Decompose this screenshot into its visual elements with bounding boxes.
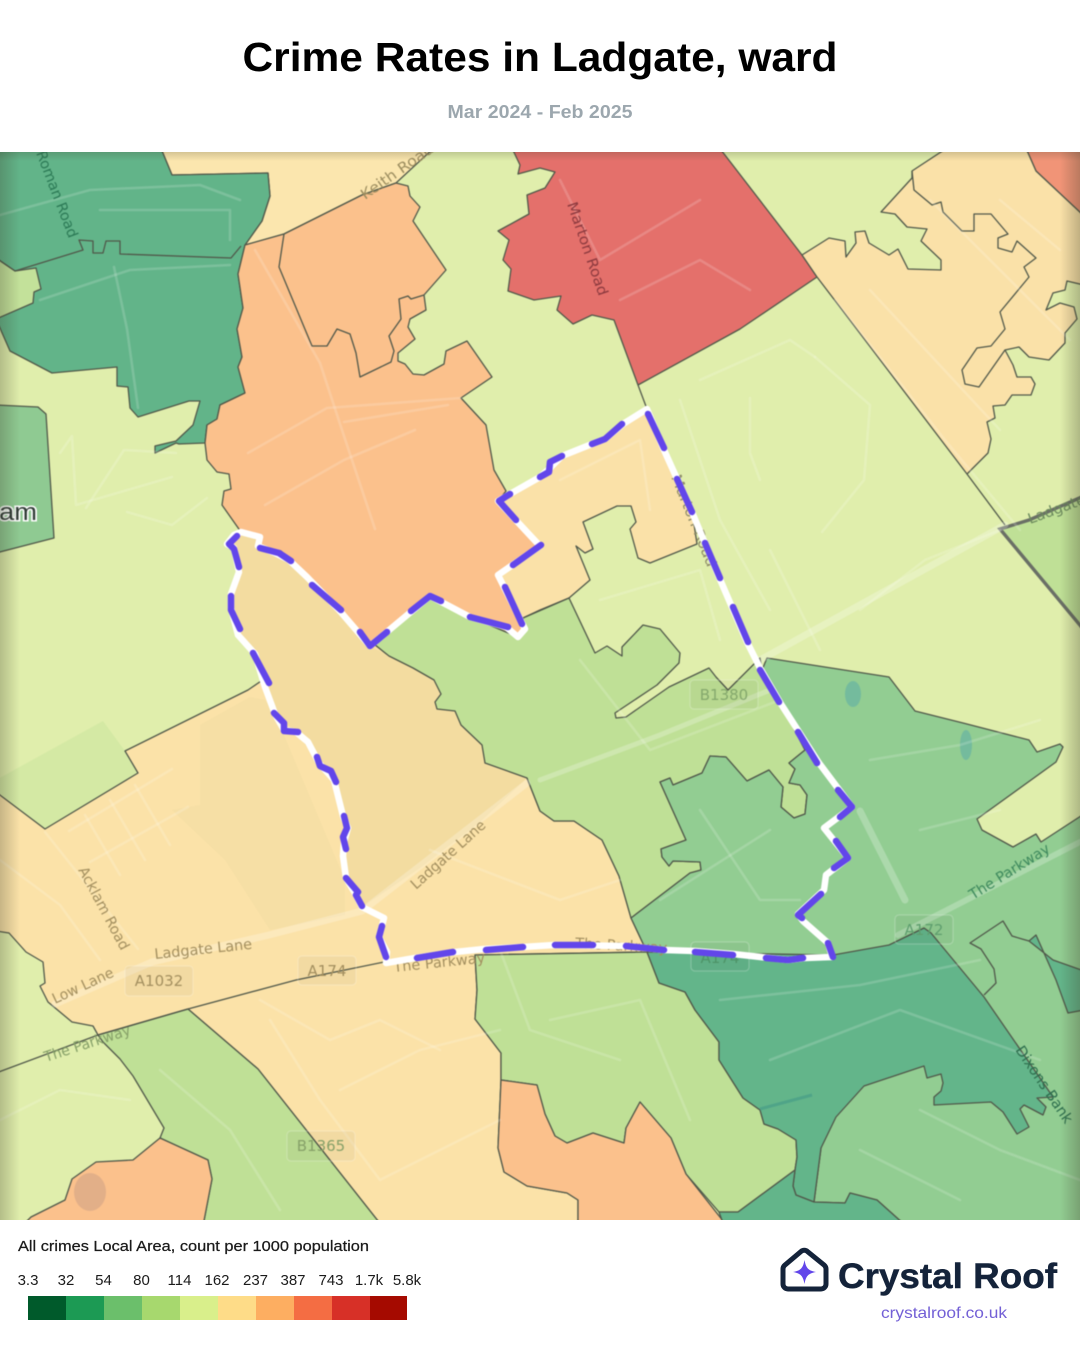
- ward boundary: purple dashes: [229, 414, 852, 960]
- region: south-west green: [98, 1009, 382, 1226]
- region: west park: [0, 405, 54, 553]
- boundary: east inner: [970, 921, 1029, 995]
- road label: Keith Road: Keith Road: [358, 141, 437, 203]
- region: south central green: [475, 952, 797, 1212]
- logo wordmark: Crystal Roof: [838, 1257, 1057, 1296]
- region: far east green: [1003, 500, 1080, 622]
- region: north-west light patch: [0, 258, 41, 319]
- region: east mid green: [631, 658, 1080, 1226]
- region: central green band: [374, 596, 807, 918]
- legend colour scale: [28, 1296, 407, 1320]
- place label: Acklam: am: [0, 499, 37, 526]
- region: south-east dark green: [647, 928, 1053, 1202]
- legend tick values: 237: [243, 1272, 268, 1289]
- road shield: A172: A172: [905, 921, 943, 939]
- boundary: east thick grey: [1000, 496, 1080, 630]
- road label: The Parkway east: The Parkway: [966, 841, 1053, 904]
- road shield: A1032: A1032: [135, 972, 183, 990]
- legend: [18, 1238, 422, 1320]
- region: south dark green strip: [718, 1171, 900, 1220]
- legend tick values: 114: [168, 1272, 191, 1289]
- legend tick values: 387: [280, 1272, 306, 1289]
- road label: Dixons Bank: Dixons Bank: [1012, 1043, 1076, 1127]
- road shield: A172: [895, 915, 953, 944]
- road shield: A1032: [125, 966, 193, 996]
- legend tick values: 1.7k: [355, 1272, 384, 1289]
- legend tick values: 32: [58, 1272, 74, 1289]
- road shield: B1380: [690, 680, 758, 709]
- road label: Marton Road: Marton Road: [563, 200, 610, 298]
- map edge shading: [0, 152, 1080, 1220]
- title: Crime Rates in Ladgate, ward: [242, 34, 838, 80]
- road label: Marton Road along the ward edge: Marton Road: [667, 473, 719, 569]
- region: south-west orange: [22, 1138, 212, 1226]
- road shield: B1365: [287, 1131, 355, 1161]
- legend tick values: 80: [133, 1272, 150, 1289]
- logo: Crystal Roof: [783, 1250, 1057, 1322]
- road label: Acklam Road: Acklam Road: [74, 864, 132, 953]
- region: south orange: [498, 1080, 727, 1226]
- roads: [0, 180, 1080, 1210]
- icon: purple star: [793, 1260, 816, 1284]
- road label: The Parkway centre: The Parkway: [392, 950, 486, 976]
- road label: Ladgate Lane west: Ladgate Lane: [154, 937, 253, 963]
- region: north-east cream: [802, 146, 1080, 474]
- region: east dark green patch: [1029, 935, 1080, 1013]
- region: south-west orange darker patch: [74, 1173, 106, 1211]
- region: south-west and central cream: [0, 532, 647, 1226]
- road label: The Parkway west: The Parkway: [41, 1023, 133, 1066]
- region: top right corner: [1028, 152, 1080, 212]
- major roads: [55, 525, 1080, 1004]
- road shield: A174 east: [691, 942, 749, 971]
- road shield: A174 west: A174: [308, 962, 346, 980]
- website url: crystalroof.co.uk: [881, 1305, 1008, 1322]
- road shield: B1365: B1365: [297, 1137, 345, 1155]
- icon: house outline: [783, 1250, 826, 1289]
- subtitle: date range: Mar 2024 - Feb 2025: [448, 102, 632, 122]
- boundary: red area south continuation: [638, 385, 647, 409]
- road label: Ladgate Lane diagonal: Ladgate Lane: [408, 817, 489, 893]
- road label: The Parkway centre east: The Parkway: [574, 936, 668, 957]
- boundary: north-west inner: [0, 240, 241, 271]
- region: ward tan open land: [438, 710, 452, 712]
- boundary: orange inner: [279, 234, 424, 377]
- road shield: A174 west: [298, 956, 356, 985]
- legend tick values: 3.3: [18, 1272, 38, 1289]
- legend tick values: 162: [204, 1272, 230, 1289]
- region: north red high-crime area: [498, 146, 817, 385]
- region: north-west dark green: [0, 146, 270, 453]
- legend tick values: 54: [95, 1272, 112, 1289]
- region: tan land west of ward: [172, 697, 345, 930]
- road label: Low Lane: Low Lane: [50, 965, 117, 1008]
- legend heading: All crimes Local Area, count per 1000 population: [18, 1238, 369, 1255]
- ward boundary: white base line: [227, 409, 852, 963]
- region: central-north orange: [205, 183, 540, 646]
- legend tick values: 5.8k: [393, 1272, 422, 1289]
- boundary: the parkway west: [0, 962, 384, 1073]
- road shield: B1380: B1380: [700, 686, 748, 704]
- boundary: east railway line: [967, 474, 1005, 525]
- map base: light green areas: [0, 146, 1080, 1226]
- road shield: A174 east: A174: [701, 949, 739, 967]
- boundary: north-east inner: [912, 171, 1036, 387]
- legend tick values: [18, 1272, 422, 1289]
- region: west green tint: [0, 721, 138, 829]
- water: ponds and stream: [760, 681, 972, 1109]
- legend tick values: 743: [318, 1272, 344, 1289]
- region: north-central ward cream: [498, 409, 697, 629]
- road label: Roman Road: Roman Road: [32, 149, 80, 240]
- region: top cream band: [160, 146, 436, 245]
